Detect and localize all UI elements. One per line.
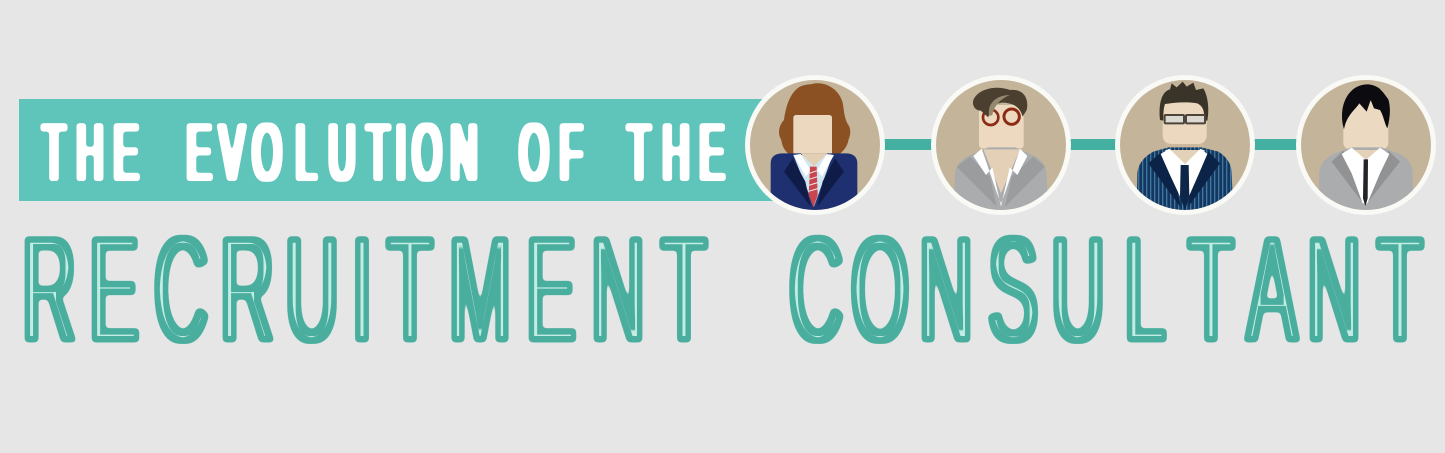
main title: recruitment consultant: RECRUITMENT CONSULTANT <box>22 205 1423 373</box>
avatar: modern consultant with black hair and skinny tie <box>1296 75 1436 215</box>
heading: the evolution of the: THE EVOLUTION OF THE <box>43 108 724 198</box>
avatar: 2000s consultant with square glasses and pinstripe suit <box>1115 75 1255 215</box>
banner <box>19 99 779 201</box>
connector lines <box>882 139 1298 150</box>
avatar: 1990s consultant with round glasses and grey jacket <box>931 75 1071 215</box>
avatar: 1980s consultant with long hair and navy suit <box>745 75 885 215</box>
